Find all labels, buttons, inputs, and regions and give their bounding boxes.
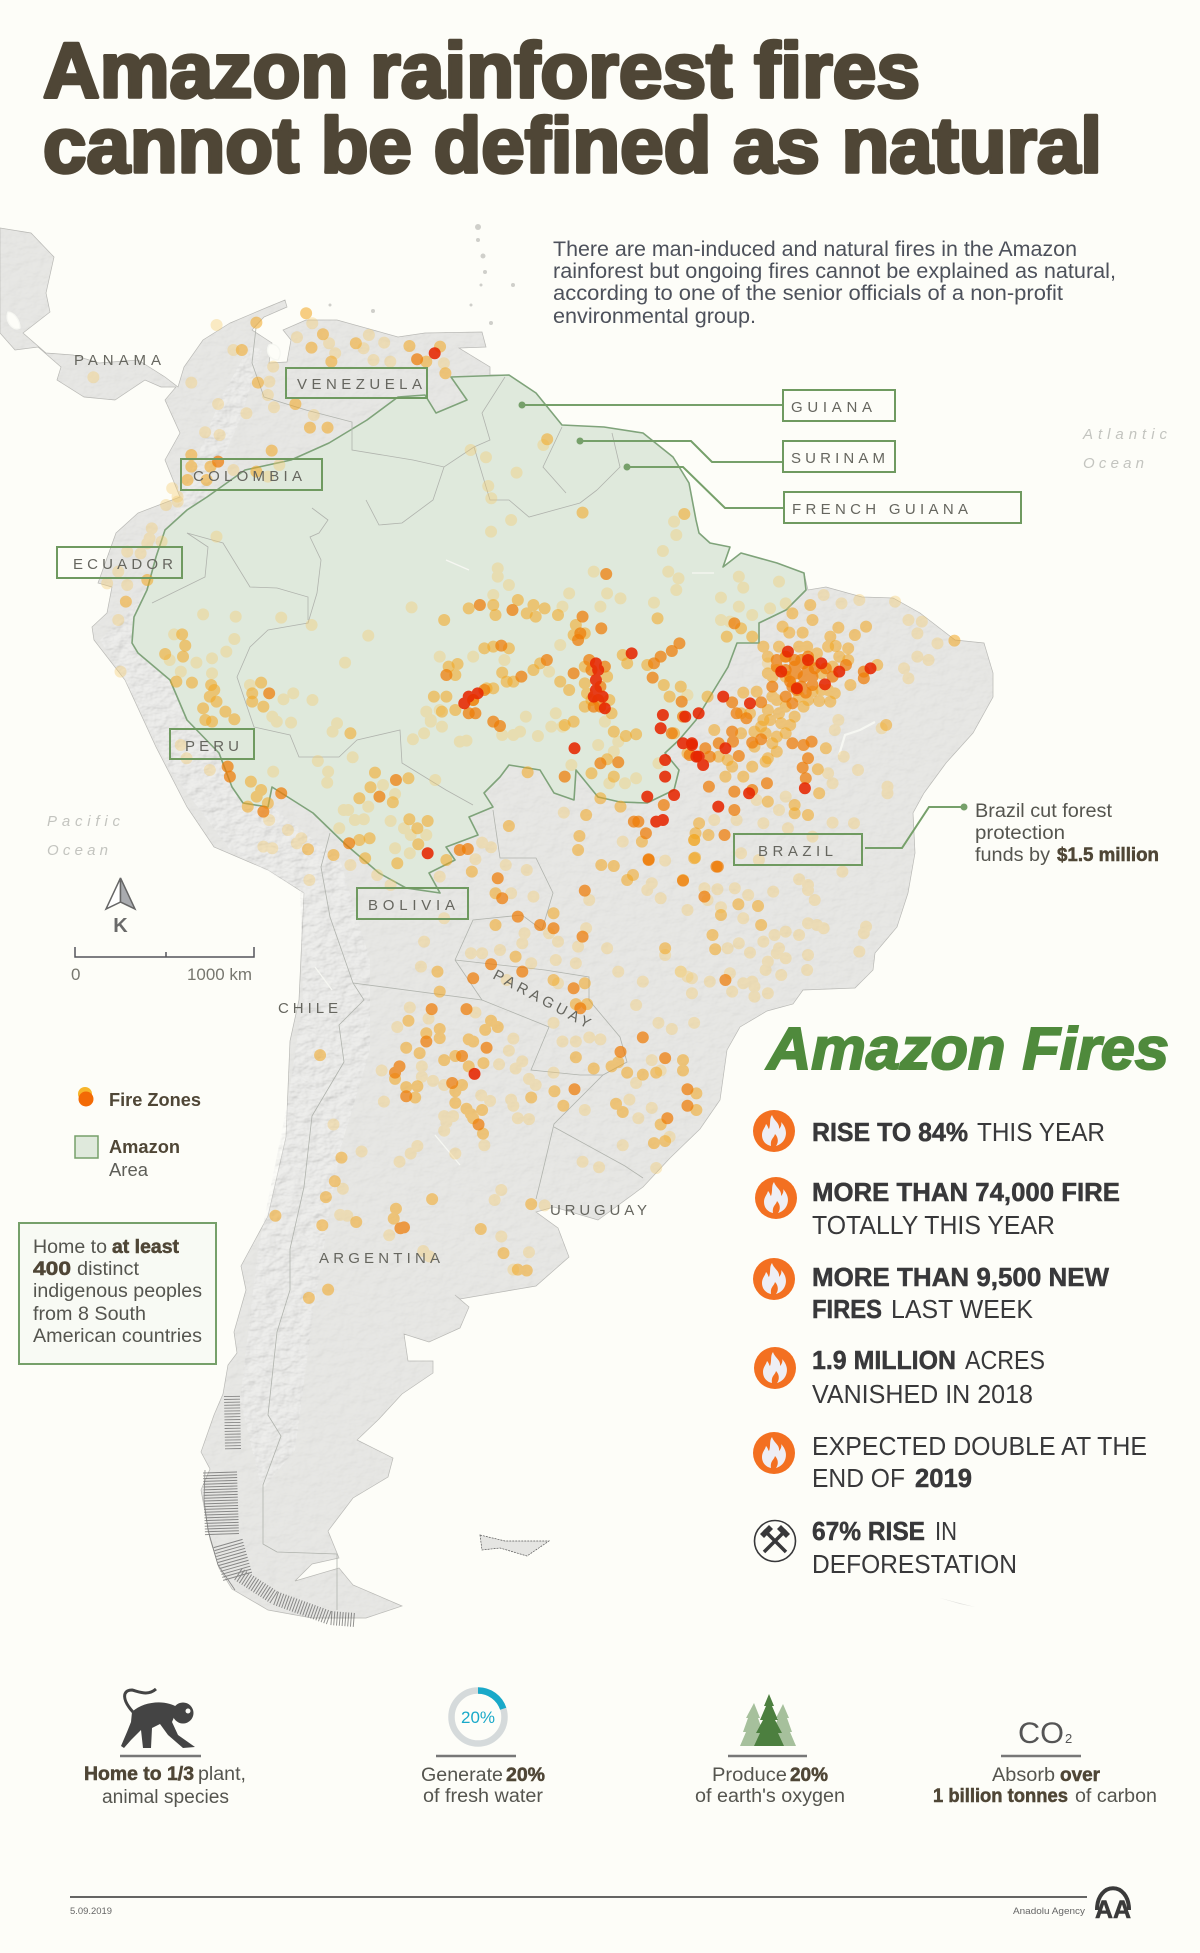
stat: more than 9,500 new fires: FIRES	[812, 1294, 882, 1324]
text: produce 20%: 20%	[790, 1765, 828, 1786]
callout: Brazil forest funds: protection	[975, 823, 1065, 844]
footer line	[70, 1896, 1087, 1898]
fire zones	[93, 313, 954, 1298]
stat: more than 74,000 fire: TOTALLY THIS YEAR	[812, 1210, 1055, 1240]
label: Panama: PANAMA	[74, 352, 161, 369]
stat: expected double: END OF	[812, 1463, 905, 1493]
label: Bolivia: BOLIVIA	[368, 897, 455, 914]
text: absorb over	[933, 1765, 1157, 1807]
stat: 1.9 million acres: 1.9 MILLION	[812, 1345, 956, 1375]
rule	[1001, 1755, 1081, 1757]
callout: indigenous peoples: American countries	[33, 1326, 202, 1347]
callout: indigenous peoples: Home to	[33, 1237, 107, 1258]
label: Bolivia	[357, 888, 468, 919]
heading: Amazon Fires: Amazon Fires	[765, 1016, 1169, 1082]
text: home to 1/3: Home to 1/3	[84, 1764, 194, 1785]
intro text: environmental group.	[553, 305, 756, 328]
stat: 1.9 million acres	[754, 1345, 1045, 1409]
rule	[120, 1755, 201, 1757]
southern Chile fjords	[204, 1396, 355, 1620]
scale bar: 0	[71, 965, 80, 984]
intro text: There are man-induced and natural fires in the Amazon	[553, 238, 1077, 261]
stat: deforestation	[754, 1516, 1017, 1579]
label: Ecuador: ECUADOR	[73, 556, 173, 573]
label: Guiana with leader: GUIANA	[791, 399, 872, 416]
stat: more than 74,000 fire: MORE THAN 74,000 FIRE	[812, 1177, 1120, 1207]
land mass	[0, 228, 993, 1618]
label: Brazil	[734, 834, 862, 865]
scale bar: 1000 km	[187, 965, 252, 984]
legend: fire zones	[78, 1087, 201, 1110]
intro text: according to one of the senior officials of a non-profit	[553, 282, 1063, 305]
Falkland Islands	[480, 1535, 549, 1556]
callout: indigenous peoples: from 8 South	[33, 1304, 146, 1325]
legend: Amazon area: Area	[109, 1160, 149, 1180]
ocean label: Pacific: Ocean	[47, 842, 108, 859]
callout: indigenous peoples: indigenous peoples	[33, 1281, 202, 1302]
callout: indigenous peoples: distinct	[77, 1259, 140, 1280]
stat: more than 9,500 new fires	[753, 1258, 1109, 1324]
text: produce 20%	[695, 1765, 845, 1807]
country borders	[152, 328, 643, 1610]
intro text	[553, 238, 1116, 328]
text: generate 20%: of fresh water	[423, 1786, 544, 1807]
label: Colombia: COLOMBIA	[193, 468, 302, 485]
text: home to 1/3: plant,	[198, 1764, 246, 1785]
icon: 20% ring: 20%	[461, 1708, 495, 1727]
text: generate 20%	[421, 1765, 545, 1807]
stat: deforestation: 67% RISE	[812, 1516, 925, 1546]
ocean label: Atlantic: Ocean	[1083, 455, 1144, 472]
text: home to 1/3	[84, 1764, 246, 1808]
label: Guiana with leader	[518, 390, 895, 421]
ocean label: Pacific	[47, 813, 120, 859]
title: Amazon rainforest fires	[43, 26, 920, 114]
stat: 1.9 million acres: ACRES	[965, 1345, 1045, 1375]
scale bar	[71, 947, 254, 984]
icon: north arrow	[106, 878, 135, 937]
label: Venezuela	[286, 368, 427, 398]
icon: CO2: CO	[1018, 1717, 1064, 1750]
callout: Brazil forest funds: funds by	[975, 845, 1051, 866]
ocean label: Atlantic	[1082, 426, 1168, 472]
icon: 20% ring	[452, 1690, 504, 1744]
label: Colombia	[181, 459, 322, 490]
stat: more than 9,500 new fires: MORE THAN 9,500 NEW	[812, 1262, 1109, 1292]
Amazon area	[132, 375, 806, 893]
Andes relief	[100, 345, 370, 1490]
credit: Anadolu Agency	[1013, 1906, 1085, 1917]
label: Argentina: ARGENTINA	[319, 1250, 440, 1267]
text: absorb over: of carbon	[1075, 1786, 1157, 1807]
label: Uruguay: URUGUAY	[550, 1202, 647, 1219]
stat: more than 74,000 fire	[755, 1177, 1120, 1240]
label: Peru: PERU	[185, 738, 239, 755]
ocean label: Atlantic: Atlantic	[1082, 426, 1168, 443]
land relief	[0, 228, 993, 1618]
stat: rise to 84%	[753, 1110, 1105, 1152]
rule	[728, 1755, 807, 1757]
Caribbean islands	[328, 224, 975, 1607]
text: absorb over: over	[1060, 1765, 1101, 1786]
label: Ecuador	[57, 547, 182, 578]
label: Brazil: BRAZIL	[758, 843, 833, 860]
text: absorb over: 1 billion tonnes	[933, 1786, 1068, 1807]
icon: monkey	[121, 1689, 195, 1748]
medium fires	[126, 313, 954, 1298]
title: cannot be defined as natural	[43, 101, 1102, 189]
stat: more than 9,500 new fires: LAST WEEK	[891, 1294, 1034, 1324]
callout: Brazil forest funds	[865, 801, 1159, 866]
label: Peru	[170, 729, 254, 759]
callout: indigenous peoples	[19, 1223, 216, 1364]
icon: CO2: 2	[1065, 1731, 1072, 1746]
red fires	[428, 353, 871, 1074]
icon: trees	[740, 1694, 796, 1746]
intro text: rainforest but ongoing fires cannot be explained as natural,	[553, 260, 1116, 283]
icon: Anadolu Agency logo: AA	[1095, 1896, 1131, 1924]
stat: expected double: 2019	[915, 1463, 972, 1493]
callout: indigenous peoples: at least	[112, 1237, 180, 1258]
callout: Brazil forest funds: Brazil cut forest	[975, 801, 1113, 822]
pale fires	[93, 323, 937, 1270]
stat: expected double: EXPECTED DOUBLE AT THE	[812, 1431, 1147, 1461]
stat: deforestation: DEFORESTATION	[812, 1549, 1017, 1579]
callout: indigenous peoples: 400	[33, 1259, 71, 1280]
stat: expected double	[753, 1431, 1147, 1493]
legend: fire zones: Fire Zones	[109, 1090, 201, 1110]
legend: Amazon area: Amazon	[109, 1137, 180, 1157]
stat: rise to 84%: THIS YEAR	[977, 1117, 1105, 1147]
label: Venezuela: VENEZUELA	[297, 376, 422, 393]
label: Chile: CHILE	[278, 1000, 338, 1017]
label: Surinam with leader: SURINAM	[791, 450, 885, 467]
text: absorb over: Absorb	[992, 1765, 1055, 1786]
text: generate 20%: 20%	[506, 1765, 545, 1786]
stat: 1.9 million acres: VANISHED IN 2018	[812, 1379, 1033, 1409]
icon: north arrow: K	[113, 915, 128, 937]
legend: Amazon area	[75, 1136, 180, 1180]
label: French Guiana with leader	[624, 464, 1021, 523]
ocean label: Pacific: Pacific	[47, 813, 120, 830]
callout: Brazil forest funds: $1.5 million	[1057, 845, 1159, 866]
rule	[436, 1755, 516, 1757]
stat: deforestation: IN	[935, 1516, 957, 1546]
text: home to 1/3: animal species	[102, 1787, 229, 1808]
label: Paraguay: PARAGUAY	[490, 967, 593, 1032]
map of South America	[0, 224, 993, 1620]
title	[43, 26, 1102, 189]
date: 5.09.2019	[70, 1906, 112, 1916]
text: produce 20%: of earth's oxygen	[695, 1786, 845, 1807]
stat: rise to 84%: RISE TO 84%	[812, 1117, 968, 1147]
label: Surinam with leader	[576, 438, 895, 472]
text: produce 20%: Produce	[712, 1765, 787, 1786]
text: generate 20%: Generate	[421, 1765, 503, 1786]
label: French Guiana with leader: FRENCH GUIANA	[792, 501, 968, 518]
orange fires	[218, 359, 864, 1228]
lakes and rivers	[7, 312, 875, 1165]
